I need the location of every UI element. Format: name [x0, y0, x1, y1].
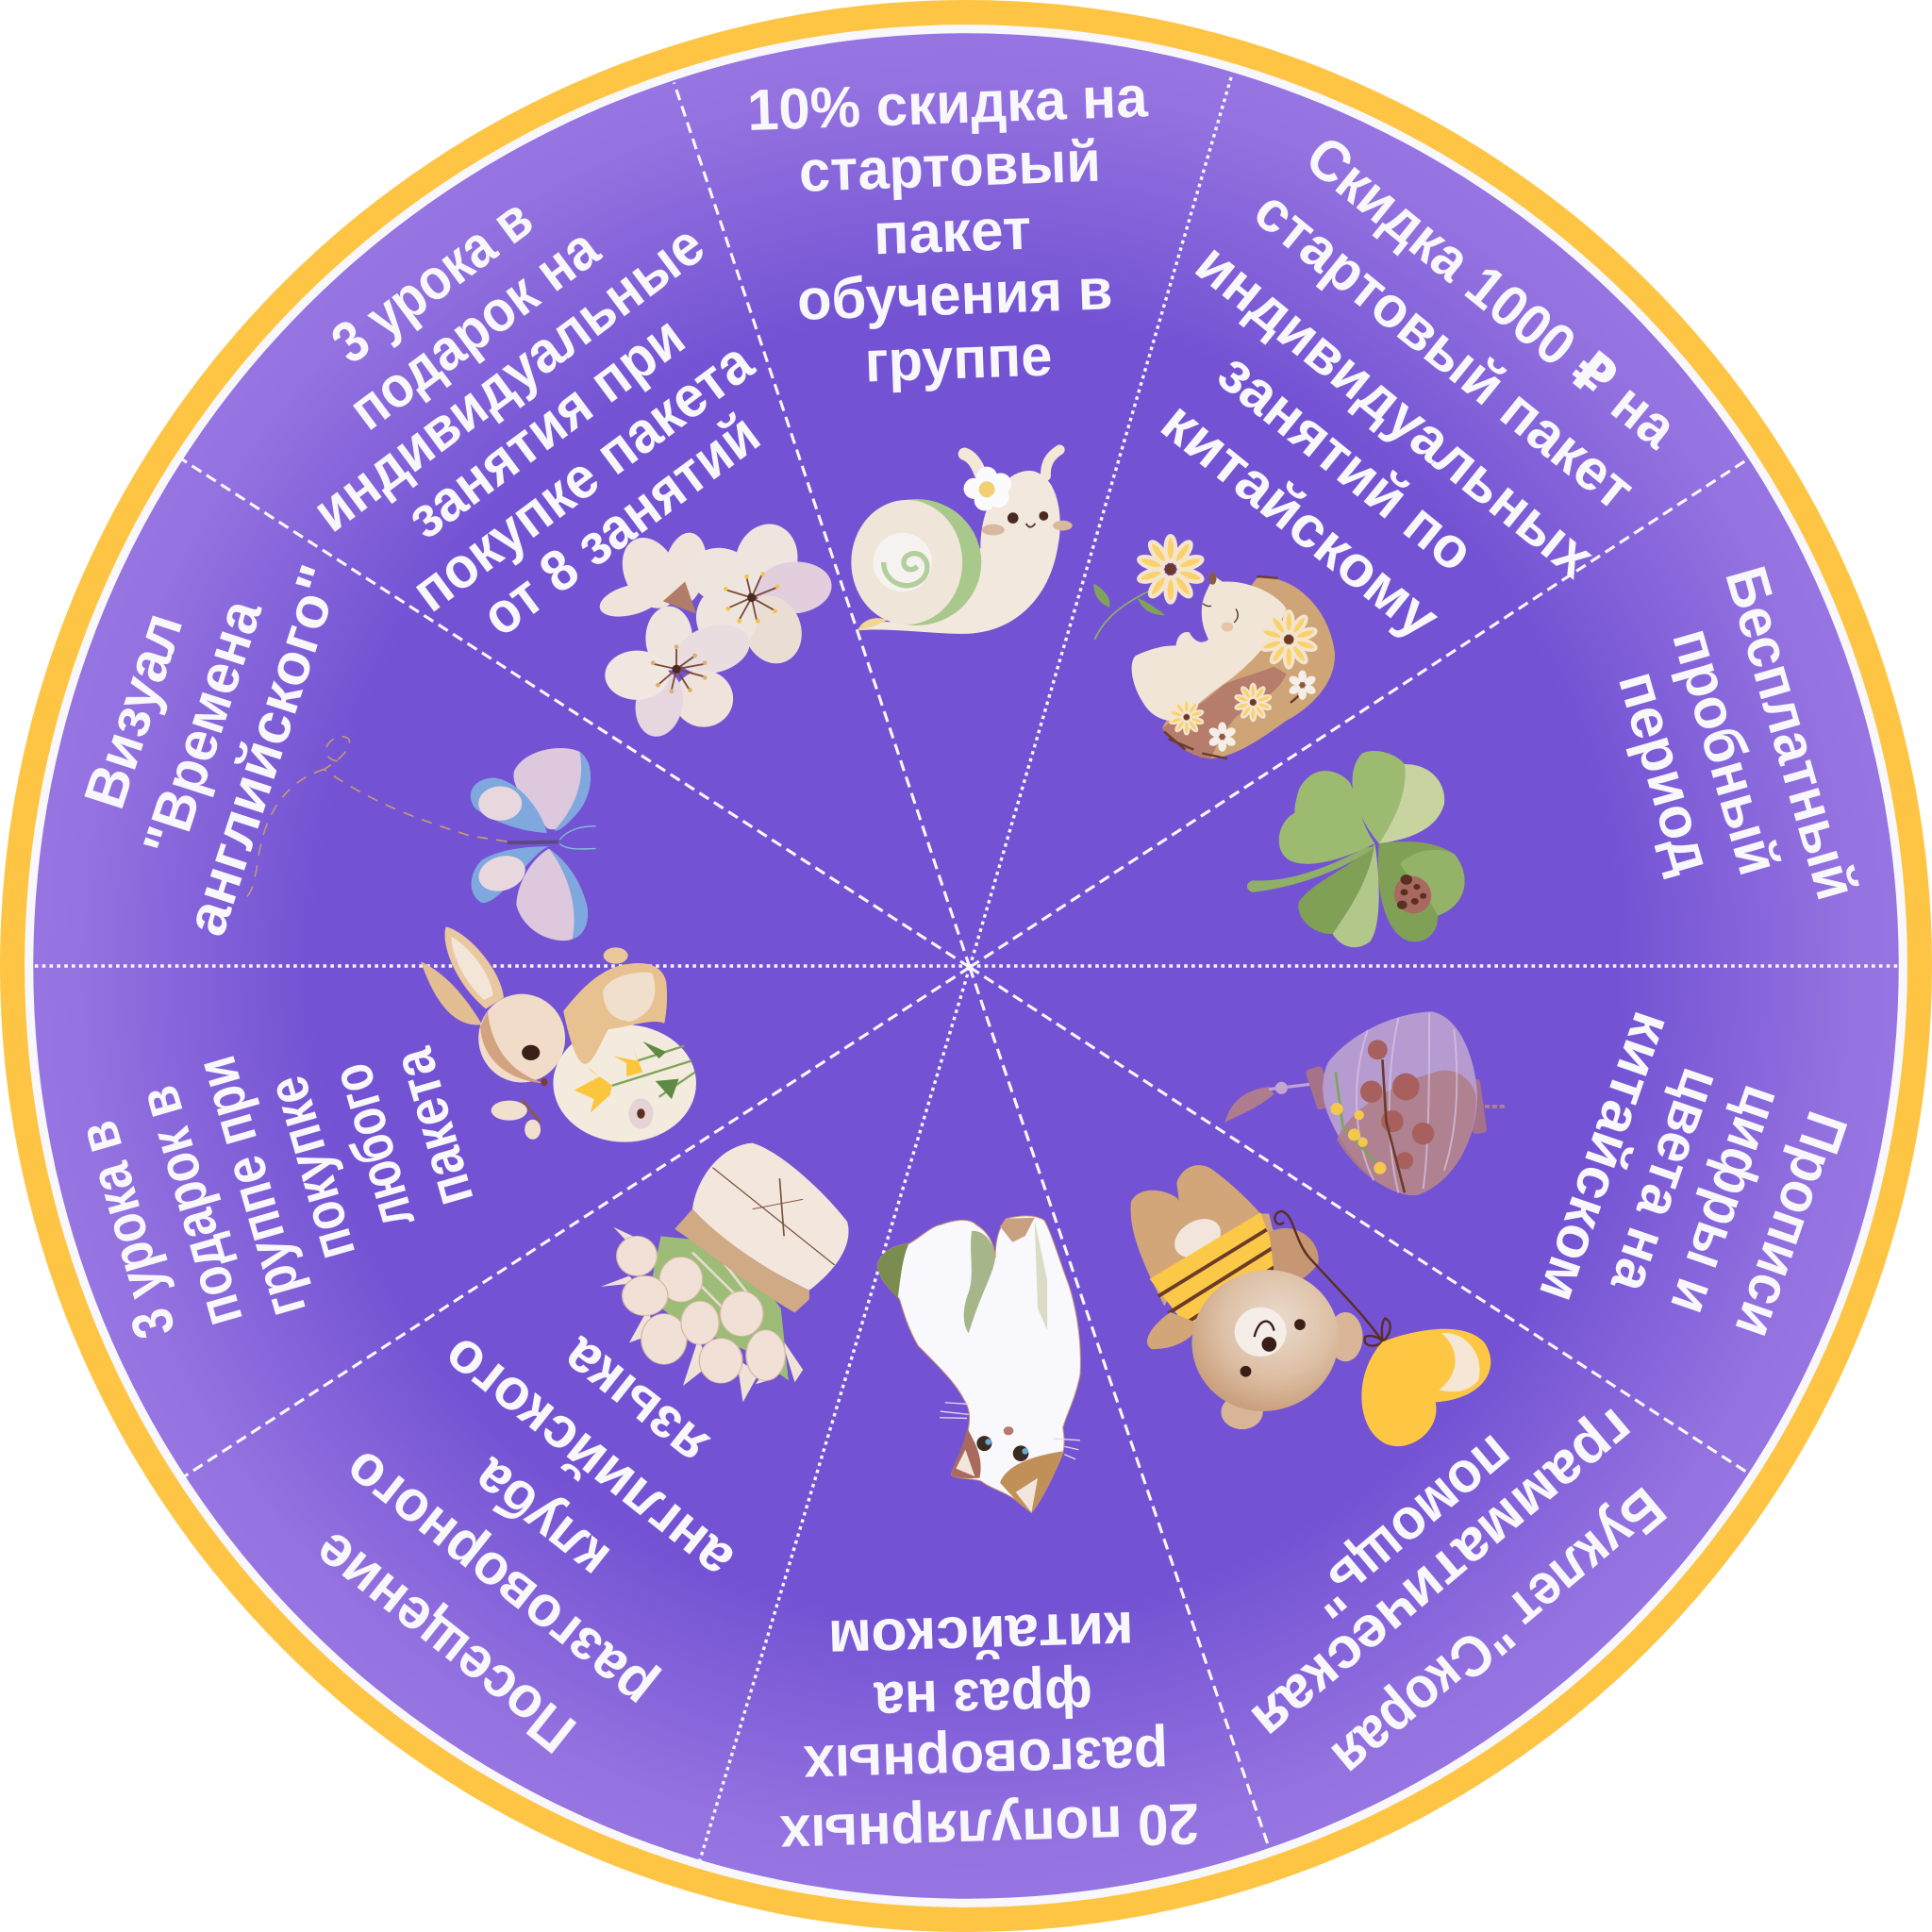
text: group lessons gift: любого — [318, 1057, 427, 1236]
text: tenses visual: "Времена — [131, 591, 275, 864]
panel: three free group lessons — [64, 926, 696, 1345]
panel: individual discount — [1093, 124, 1690, 758]
text: speaking club: разговорного — [331, 1437, 666, 1722]
text: 10% discount: стартовый — [798, 129, 1102, 205]
icon: cat — [877, 1216, 1080, 1512]
text: individual lessons gift: подарок на — [337, 215, 611, 442]
text: 10% discount — [746, 64, 1149, 394]
panel: three free individual lessons — [301, 186, 834, 741]
text: individual lessons gift: занятия при — [394, 304, 696, 552]
text: tenses visual: английского" — [173, 558, 354, 943]
text: free trial period — [1606, 559, 1870, 907]
text: speaking club: языка — [548, 1324, 720, 1480]
panel: chinese phrases — [779, 1216, 1200, 1868]
text: tenses visual: Визуал — [72, 606, 195, 816]
icon: chinese lantern — [1224, 1011, 1505, 1195]
text: booklet: Буклет "Скорая — [1320, 1474, 1678, 1790]
text: copybooks: цифры и — [1657, 1078, 1796, 1323]
text: speaking club — [301, 1324, 745, 1766]
text: 1000 rub discount: китайскому — [1149, 389, 1452, 651]
text: 10% discount: обучения в — [796, 257, 1113, 333]
text: tenses visual — [72, 558, 354, 943]
text: copybooks — [1526, 1004, 1859, 1346]
panel: grammar booklet — [1131, 1165, 1678, 1790]
text: free trial period: период — [1606, 664, 1725, 881]
text: individual lessons gift: от 8 занятий — [470, 401, 772, 649]
text: 10% discount: 10% скидка на — [746, 64, 1149, 143]
panel: free trial — [1247, 559, 1870, 947]
panel: chinese copybooks — [1224, 1004, 1859, 1346]
text: free trial period: Бесплатный — [1712, 559, 1870, 907]
text: 20 phrases — [779, 1599, 1200, 1868]
panel: english speaking club — [301, 1143, 849, 1766]
text: 1000 rub discount: занятий по — [1206, 340, 1486, 585]
text: group lessons gift: 3 урока в — [64, 1114, 188, 1345]
text: individual lessons gift: индивидуальные — [301, 212, 716, 544]
text: 10% discount: пакет — [873, 197, 1032, 267]
text: group lessons gift: группе при — [183, 1049, 319, 1324]
icon: butterfly — [247, 737, 596, 941]
icon: snail — [851, 450, 1073, 634]
icon: clover with ladybug — [1247, 751, 1465, 947]
text: 20 phrases: китайском — [827, 1599, 1135, 1673]
text: 20 phrases: 20 популярных — [779, 1790, 1200, 1868]
icon: hedgehog — [1093, 536, 1335, 758]
icon: bunny with egg — [421, 926, 696, 1142]
text: free trial period: пробный — [1659, 622, 1791, 882]
text: group lessons gift — [64, 1041, 487, 1345]
text: 20 phrases: разговорных — [803, 1723, 1169, 1798]
text: speaking club: Посещение — [301, 1519, 588, 1766]
panel: tenses visual — [72, 558, 596, 943]
text: 1000 rub discount: индивидуальных — [1184, 230, 1607, 591]
icon: tulip bouquet — [601, 1143, 849, 1402]
text: booklet: помощь" — [1296, 1423, 1526, 1630]
text: 1000 rub discount: стартовый пакет — [1242, 177, 1647, 523]
text: copybooks: цвета на — [1598, 1060, 1735, 1302]
text: individual lessons gift: покупке пакета — [400, 329, 766, 625]
text: group lessons gift: подарок в — [125, 1079, 256, 1334]
text: copybooks: китайском — [1526, 1004, 1686, 1310]
icon: bear with heart balloon — [1131, 1165, 1491, 1446]
icon: cherry blossoms — [596, 517, 834, 741]
text: group lessons gift: покупке — [254, 1069, 368, 1267]
text: speaking club: английского — [429, 1324, 745, 1593]
text: speaking club: клуба — [459, 1445, 621, 1592]
text: 10% discount: группе — [864, 324, 1053, 394]
text: individual lessons gift: 3 урока в — [320, 186, 544, 376]
panel: group starter discount — [746, 64, 1149, 634]
text: booklet: грамматическая — [1240, 1396, 1647, 1753]
text: copybooks: Прописи — [1722, 1104, 1859, 1346]
text: 1000 rub discount — [1149, 124, 1690, 651]
text: 20 phrases: фраз на — [873, 1663, 1093, 1735]
text: group lessons gift: пакета — [379, 1041, 487, 1213]
text: 1000 rub discount: Скидка 1000 ₽ на — [1293, 124, 1690, 461]
